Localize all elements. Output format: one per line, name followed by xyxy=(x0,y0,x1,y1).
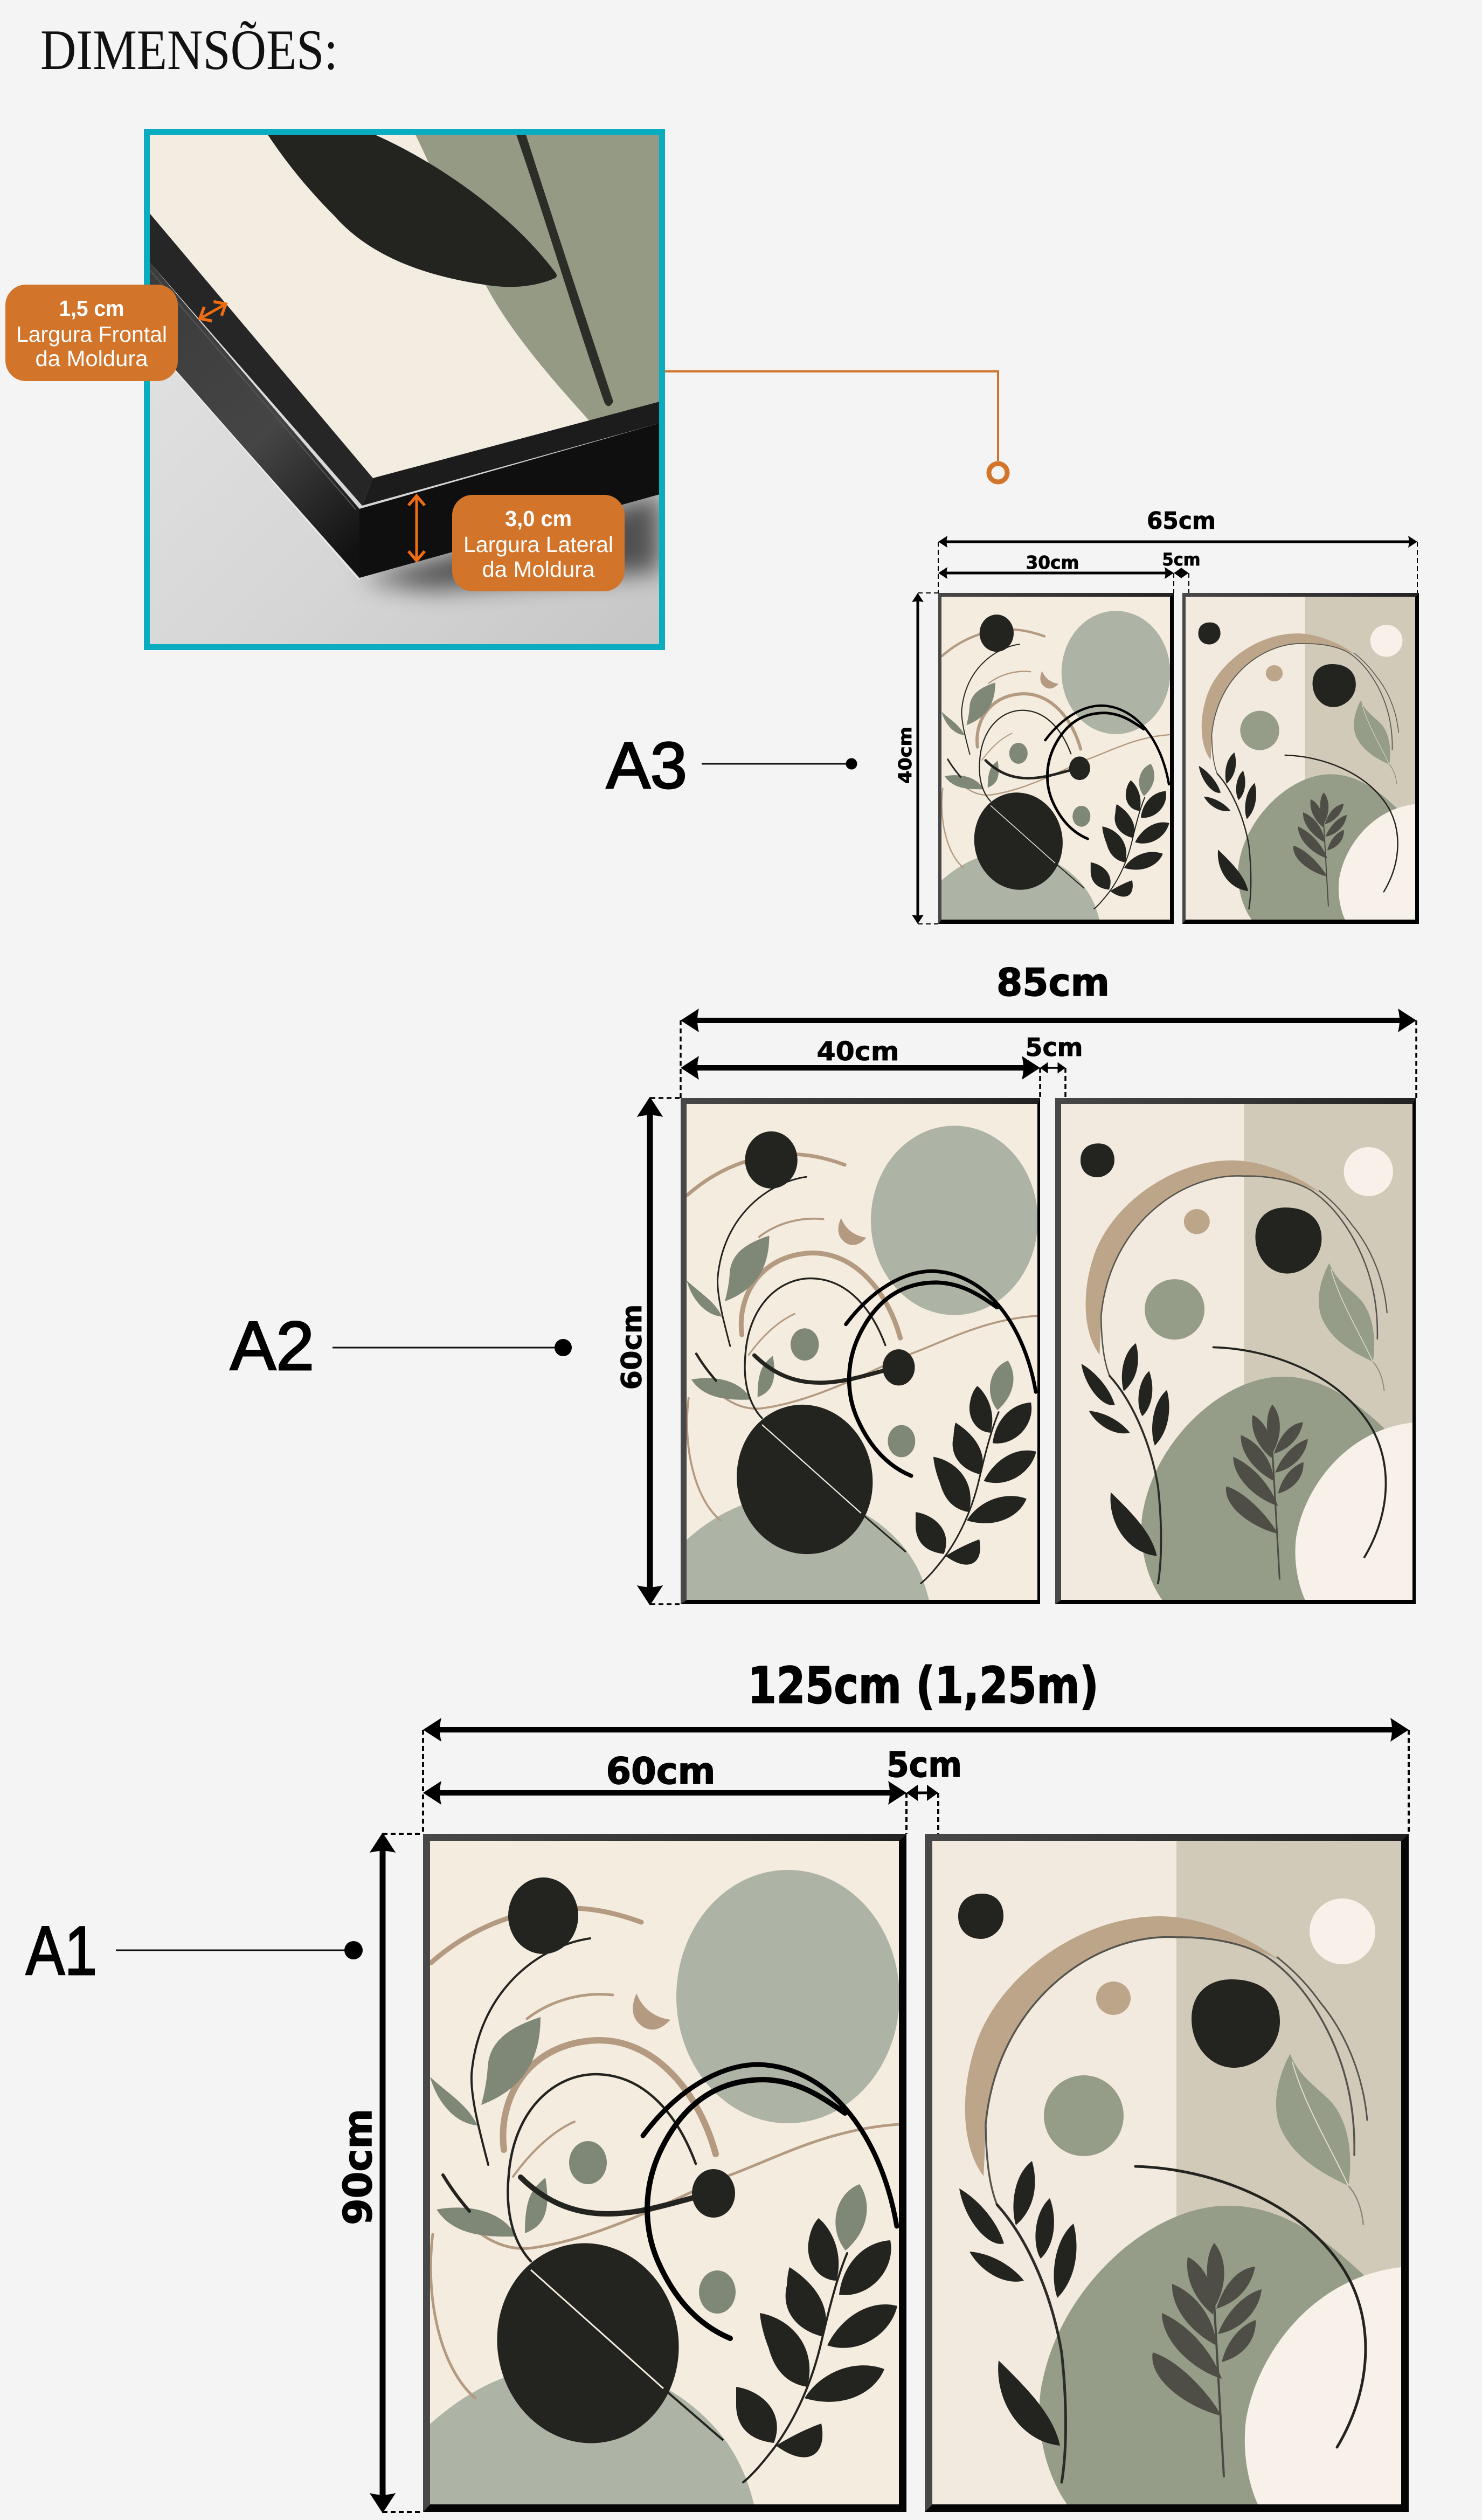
label: A2: A2 xyxy=(230,1308,314,1385)
dimensions: A1: 5cm xyxy=(887,1745,962,1785)
label: A2 xyxy=(230,1308,572,1385)
dimensions: A2: 85cm xyxy=(996,961,1110,1005)
label: A3 xyxy=(606,729,857,802)
callout: lateral width: da Moldura xyxy=(482,557,595,582)
callout: lateral width: 3,0 cm xyxy=(505,506,572,531)
dimensions: A2: 5cm xyxy=(1025,1033,1083,1062)
dimensions: A2: 60cm xyxy=(616,1304,648,1390)
dimensions: A1: 90cm xyxy=(335,2109,380,2225)
connector line xyxy=(665,371,998,461)
title: DIMENSÕES: xyxy=(40,18,338,81)
dimensions: A3: 40cm xyxy=(895,727,916,784)
arrow: lateral width xyxy=(415,496,418,561)
dimensions: A1: 60cm xyxy=(606,1750,716,1793)
dimensions: A2: 40cm xyxy=(817,1037,899,1067)
callout: frontal width: 1,5 cm xyxy=(59,296,124,321)
panel: A2 left xyxy=(681,1098,1040,1604)
dimensions: A3: 5cm xyxy=(1162,549,1201,570)
dimensions: A3: 65cm xyxy=(1147,507,1216,535)
panel: frame detail photo xyxy=(147,132,662,647)
callout: lateral width: Largura Lateral xyxy=(463,532,613,557)
label: A1 xyxy=(26,1913,363,1990)
panel: A1 left xyxy=(423,1834,906,2512)
callout: lateral width xyxy=(452,495,625,591)
dimensions: A3 xyxy=(895,507,1417,924)
panel: A1 right xyxy=(925,1834,1409,2512)
arrow: frontal width xyxy=(200,304,226,319)
panel: A3 left xyxy=(938,593,1174,924)
label: A3: A3 xyxy=(606,729,687,802)
label: A1: A1 xyxy=(26,1913,97,1990)
dimensions: A1 xyxy=(335,1656,1409,2512)
connector ring xyxy=(989,464,1007,482)
dimensions: A2 xyxy=(616,961,1416,1604)
callout: frontal width: da Moldura xyxy=(36,346,148,371)
panel: A3 right xyxy=(1182,593,1419,924)
callout: frontal width: Largura Frontal xyxy=(16,322,167,347)
dimensions: A1: 125cm (1,25m) xyxy=(748,1656,1098,1715)
dimensions: A3: 30cm xyxy=(1026,552,1079,573)
callout: frontal width xyxy=(5,285,178,381)
panel: A2 right xyxy=(1055,1098,1416,1604)
